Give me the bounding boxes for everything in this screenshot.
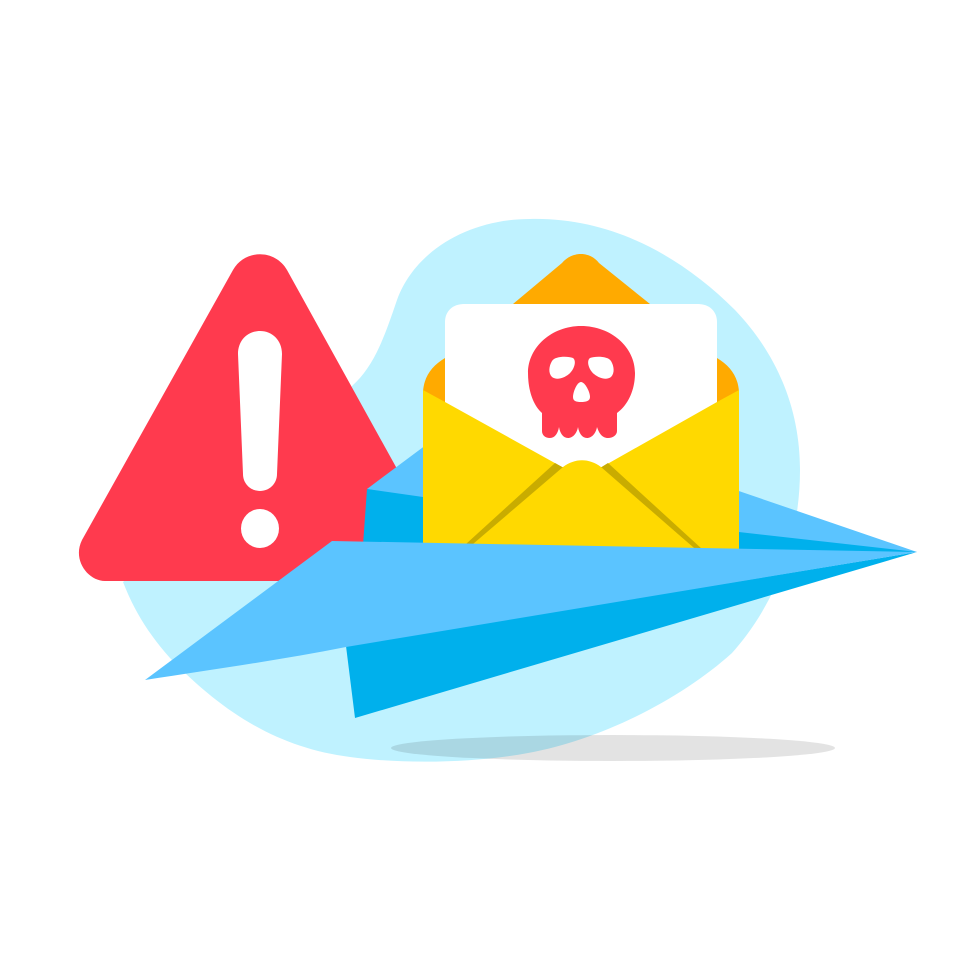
paper plane rear wing: [363, 442, 917, 552]
lower dark wing: [346, 552, 917, 718]
exclamation dot: [241, 509, 279, 548]
envelope front pocket: [423, 390, 739, 550]
envelope front flap: [473, 460, 694, 548]
paper plane front wings: [145, 541, 917, 718]
envelope back flap: [423, 254, 739, 480]
warning triangle: [79, 254, 440, 581]
background blob: [123, 219, 800, 762]
upper light wing: [145, 541, 917, 680]
skull icon: [528, 326, 635, 438]
letter: [445, 304, 717, 480]
exclamation bar: [238, 331, 282, 491]
envelope fold shadows: [466, 463, 564, 544]
envelope: [423, 254, 739, 550]
ground shadow: [391, 735, 835, 761]
